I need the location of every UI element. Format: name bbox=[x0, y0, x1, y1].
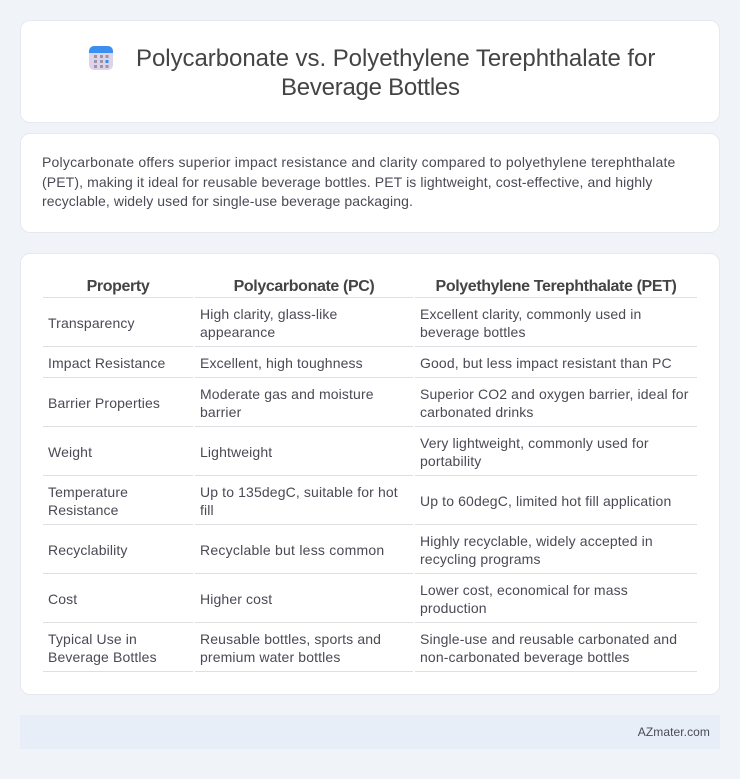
text: Typical Use in bbox=[48, 631, 137, 647]
table header bbox=[87, 278, 676, 295]
text: portability bbox=[420, 453, 481, 469]
summary text: Polycarbonate offers superior impact resistance and clarity compared to polyethylene terephthalate bbox=[42, 154, 676, 170]
comparison table bbox=[43, 278, 697, 672]
text: production bbox=[420, 600, 487, 616]
text: Moderate gas and moisture bbox=[200, 386, 374, 402]
text: Up to 60degC, limited hot fill application bbox=[420, 493, 671, 509]
text: Impact Resistance bbox=[48, 355, 165, 371]
text: Higher cost bbox=[200, 591, 272, 607]
text: Excellent clarity, commonly used in bbox=[420, 306, 641, 322]
text: Recyclability bbox=[48, 542, 128, 558]
text: Good, but less impact resistant than PC bbox=[420, 355, 672, 371]
text: Property bbox=[87, 278, 149, 295]
text: Single-use and reusable carbonated and bbox=[420, 631, 677, 647]
text: recycling programs bbox=[420, 551, 541, 567]
title text: Polycarbonate vs. Polyethylene Terephthalate for bbox=[136, 45, 655, 72]
text: Polyethylene Terephthalate (PET) bbox=[436, 278, 676, 295]
text: Recyclable but less common bbox=[200, 542, 384, 558]
text: Highly recyclable, widely accepted in bbox=[420, 533, 653, 549]
text: Polycarbonate (PC) bbox=[234, 278, 374, 295]
summary text: (PET), making it ideal for reusable beverage bottles. PET is lightweight, cost-effective, and highly bbox=[42, 174, 652, 190]
text: Very lightweight, commonly used for bbox=[420, 435, 649, 451]
text: appearance bbox=[200, 324, 275, 340]
panel: summary bbox=[20, 133, 720, 233]
row: temperature resistance bbox=[48, 484, 671, 518]
text: beverage bottles bbox=[420, 324, 526, 340]
text: Superior CO2 and oxygen barrier, ideal for bbox=[420, 386, 688, 402]
text: Lightweight bbox=[200, 444, 272, 460]
row: transparency bbox=[48, 306, 641, 340]
row: typical use bbox=[48, 631, 677, 665]
text: Lower cost, economical for mass bbox=[420, 582, 628, 598]
text: Reusable bottles, sports and bbox=[200, 631, 381, 647]
text: Cost bbox=[48, 591, 77, 607]
row: barrier properties bbox=[48, 386, 688, 420]
title text bbox=[136, 45, 655, 101]
text: High clarity, glass-like bbox=[200, 306, 337, 322]
text: Temperature bbox=[48, 484, 128, 500]
text: Barrier Properties bbox=[48, 395, 160, 411]
text: Up to 135degC, suitable for hot bbox=[200, 484, 398, 500]
row: weight bbox=[48, 435, 649, 469]
text: Excellent, high toughness bbox=[200, 355, 363, 371]
title text: Beverage Bottles bbox=[281, 74, 460, 101]
panel: title bbox=[20, 20, 720, 123]
text: non-carbonated beverage bottles bbox=[420, 649, 630, 665]
footer bar bbox=[20, 715, 720, 749]
panel: comparison table bbox=[20, 253, 720, 695]
icon: calendar bbox=[89, 46, 113, 70]
text: Beverage Bottles bbox=[48, 649, 157, 665]
summary text: recyclable, widely used for single-use beverage packaging. bbox=[42, 193, 413, 209]
text: barrier bbox=[200, 404, 241, 420]
row: cost bbox=[48, 582, 628, 616]
row: impact resistance bbox=[48, 355, 672, 371]
footer credit: AZmater.com bbox=[638, 725, 710, 739]
row: recyclability bbox=[48, 533, 653, 567]
text: Weight bbox=[48, 444, 92, 460]
text: premium water bottles bbox=[200, 649, 340, 665]
text: Resistance bbox=[48, 502, 119, 518]
text: Transparency bbox=[48, 315, 135, 331]
text: fill bbox=[200, 502, 214, 518]
summary text bbox=[42, 154, 676, 209]
text: carbonated drinks bbox=[420, 404, 534, 420]
